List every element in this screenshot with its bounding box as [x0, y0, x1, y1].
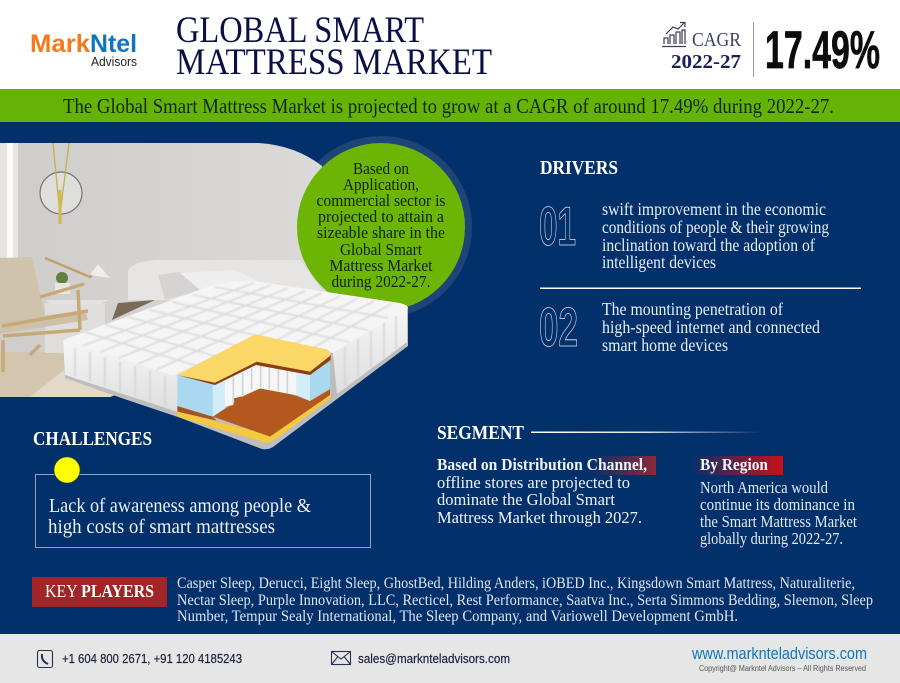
heading: segment: SEGMENT — [437, 422, 525, 444]
by region text: globally during 2022-27. — [700, 529, 843, 548]
driver 02 text: smart home devices — [602, 335, 728, 355]
logo: MarkNtel Advisors: Mark — [30, 30, 90, 58]
heading: challenges: CHALLENGES — [33, 428, 152, 450]
distribution channel text — [437, 455, 647, 527]
by region text: North America would — [700, 478, 829, 497]
mattress illustration — [63, 281, 408, 449]
distribution channel text: Based on Distribution Channel, — [437, 455, 647, 474]
by region text: continue its dominance in — [700, 495, 855, 514]
green callout circle — [297, 143, 465, 311]
driver 02 text: high-speed internet and connected — [602, 317, 820, 337]
mattress left side — [63, 340, 178, 412]
green callout circle: Based on — [353, 159, 409, 178]
driver 01 number: 01 — [539, 195, 576, 257]
green callout circle: commercial sector is — [316, 191, 446, 210]
coir base — [213, 388, 330, 437]
website: www.marknteladvisors.com — [691, 645, 867, 663]
CAGR label: CAGR — [692, 29, 742, 51]
blue foam blocks — [177, 375, 225, 417]
challenge text: high costs of smart mattresses — [48, 516, 275, 538]
key players list: Number, Tempur Sealy International, The Sleep Company, and Variowell Development GmbH. — [177, 608, 738, 625]
green callout circle: Application, — [343, 175, 419, 194]
logo: MarkNtel Advisors: Ntel — [90, 30, 137, 58]
logo: MarkNtel Advisors: Advisors — [91, 55, 137, 69]
driver 01 text: conditions of people & their growing — [602, 217, 829, 237]
mattress cutaway layers — [177, 334, 331, 442]
driver 01 text: swift improvement in the economic — [602, 199, 826, 219]
floor — [0, 352, 114, 397]
challenges section — [33, 428, 370, 548]
driver 01 text: intelligent devices — [602, 252, 716, 272]
challenge text — [48, 495, 311, 538]
green callout circle: Mattress Market — [330, 256, 433, 275]
chair — [0, 257, 88, 372]
phone numbers: +1 604 800 2671, +91 120 4185243 — [62, 652, 242, 666]
circle halo — [290, 136, 472, 318]
logo: MarkNtel Advisors — [30, 30, 137, 69]
mattress right side — [333, 308, 407, 394]
pendant lamp — [40, 143, 82, 224]
title — [176, 10, 492, 83]
footer — [0, 634, 900, 683]
divider — [753, 22, 754, 77]
icon: phone — [38, 650, 52, 668]
pillar — [0, 143, 18, 261]
bed headboard and pillows — [112, 260, 322, 320]
challenge text: Lack of awareness among people & — [49, 495, 311, 517]
yellow top foam — [177, 355, 331, 385]
driver 02 text — [602, 299, 820, 355]
heading: drivers: DRIVERS — [540, 157, 618, 179]
wall — [0, 143, 350, 398]
mattress base rim — [63, 308, 408, 449]
lower coir edge — [177, 406, 217, 421]
title: MATTRESS MARKET — [176, 42, 492, 83]
key players list — [177, 575, 873, 625]
bedroom photo — [0, 143, 350, 398]
segment rule — [531, 432, 761, 433]
title: GLOBAL SMART — [176, 10, 424, 51]
segment section — [437, 422, 857, 548]
green callout circle: during 2022-27. — [332, 272, 430, 291]
distribution channel text: Mattress Market through 2027. — [437, 508, 642, 527]
by region text — [700, 478, 857, 548]
icon: mail — [332, 652, 350, 664]
bottom yellow layer — [177, 394, 331, 442]
by region highlight — [690, 456, 783, 475]
key players badge — [32, 577, 167, 607]
header background — [0, 0, 900, 90]
driver 01 text — [602, 199, 829, 272]
side table and desk lamp — [45, 258, 110, 304]
navy main panel — [0, 122, 900, 634]
driver 02 number: 02 — [539, 296, 578, 358]
key players badge: KEY PLAYERS — [45, 581, 154, 601]
green banner — [0, 89, 900, 122]
bench below table — [45, 303, 105, 353]
distribution channel highlight — [590, 456, 656, 475]
mattress top surface — [63, 281, 408, 377]
distribution channel text: dominate the Global Smart — [437, 490, 615, 509]
driver divider — [540, 288, 861, 289]
green callout circle: Global Smart — [340, 240, 422, 259]
copyright: Copyright@ Markntel Advisors – All Rights Reserved — [699, 664, 866, 673]
green callout circle: sizeable share in the — [317, 223, 445, 242]
icon: growth chart — [662, 22, 686, 46]
CAGR block — [662, 21, 880, 80]
by region text: the Smart Mattress Market — [700, 512, 857, 531]
drivers section — [539, 157, 861, 358]
challenge box — [36, 474, 370, 548]
key players section — [32, 575, 873, 625]
by region heading: By Region — [700, 455, 768, 474]
email: sales@marknteladvisors.com — [358, 652, 510, 666]
period: 2022-27 — [671, 51, 741, 73]
driver 02 text: The mounting penetration of — [602, 299, 783, 319]
distribution channel text: offline stores are projected to — [437, 473, 630, 492]
driver 01 text: inclination toward the adoption of — [602, 235, 815, 255]
green callout circle: projected to attain a — [318, 207, 445, 226]
springs — [225, 363, 297, 407]
yellow dot — [54, 457, 80, 483]
